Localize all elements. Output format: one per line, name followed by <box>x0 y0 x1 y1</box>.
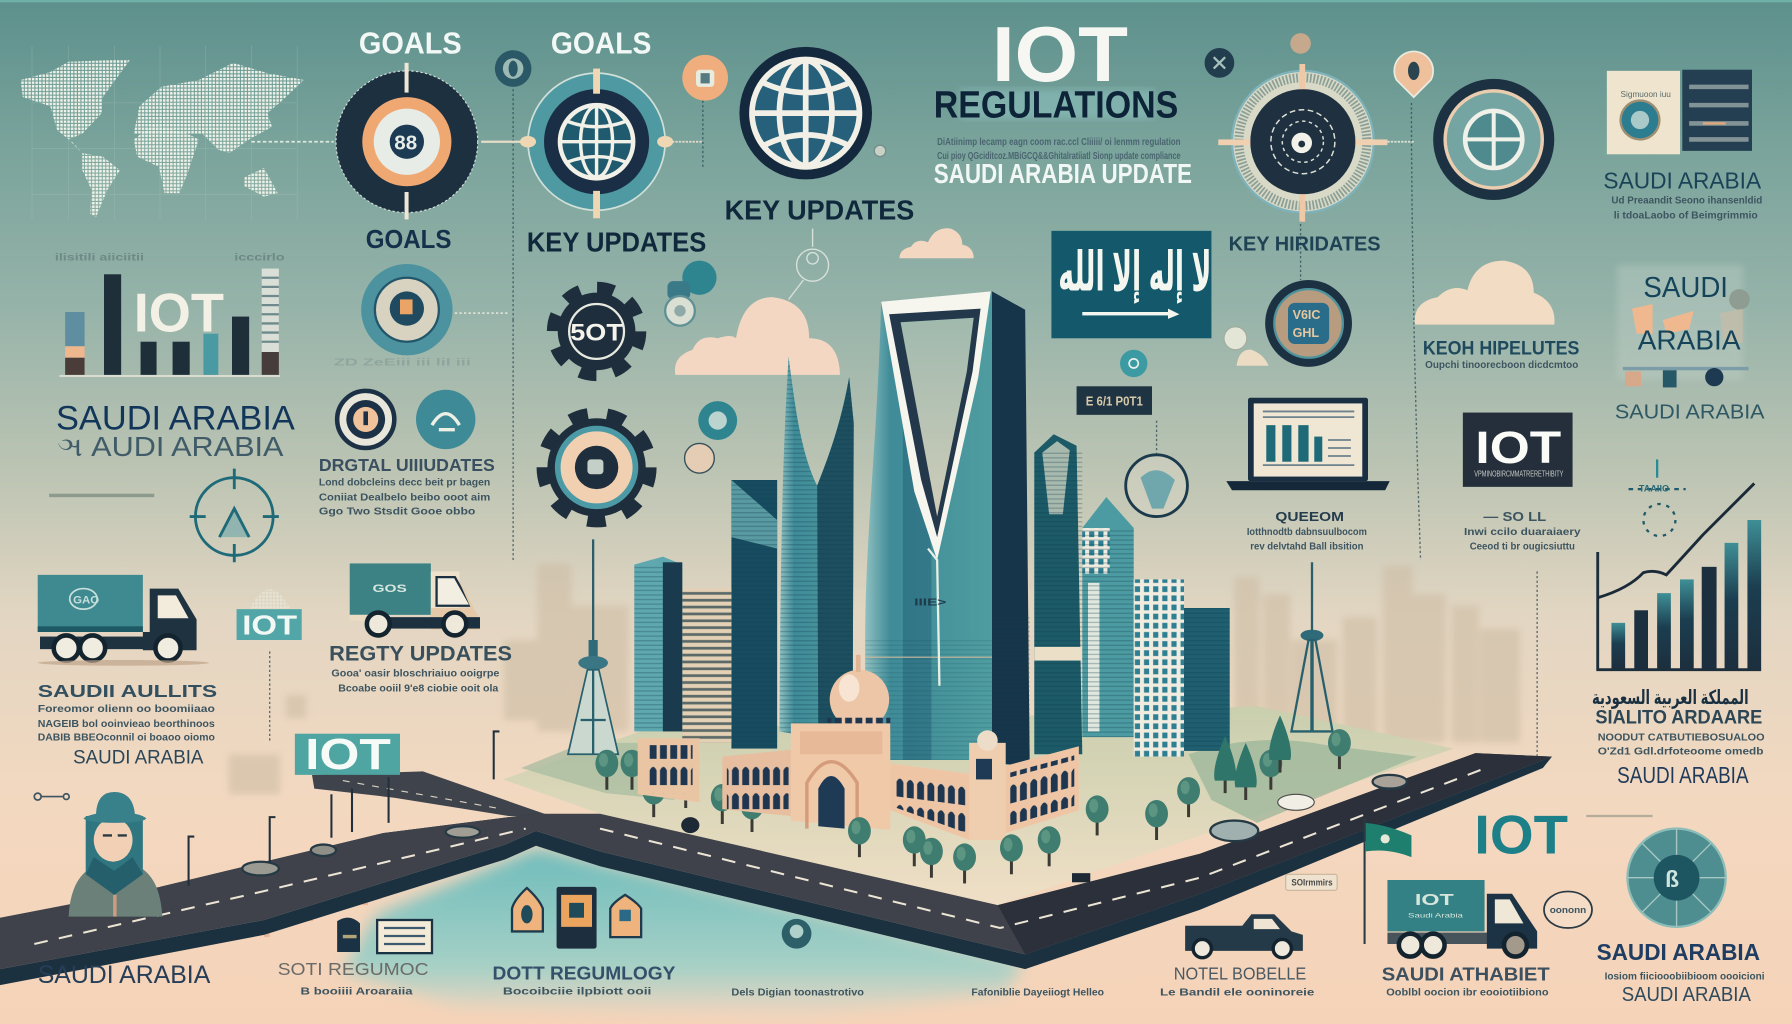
text: right arabic block: O'Zd1 Gdl.drfoteoome omedb <box>1598 746 1763 757</box>
text: لا إله إلا الله <box>1058 240 1211 304</box>
text: regty updates: REGTY UPDATES <box>329 641 512 666</box>
tower: left twin spire <box>779 357 854 745</box>
text: soti regumoc: SOTI REGUMOC <box>278 959 429 979</box>
figure: person <box>69 792 162 917</box>
truck: iot delivery <box>1387 880 1537 957</box>
tower: kingdom centre: IIIE> <box>914 598 946 609</box>
text: soti regumoc: B booiiii Aroaraiia <box>301 986 413 997</box>
text: notel bobelle: NOTEL BOBELLE <box>1174 963 1306 983</box>
sign: iot small <box>237 589 302 640</box>
text: right arabic block <box>1592 687 1765 788</box>
saudi flag panel <box>1051 231 1211 338</box>
text: digital updates: DRGTAL UIIIUDATES <box>319 455 495 475</box>
icon: key <box>34 793 69 800</box>
text: saudi athabiet <box>1382 964 1550 998</box>
icons: device and screen <box>337 918 432 953</box>
heading: goals 1: GOALS <box>359 26 462 61</box>
cloud small <box>899 228 974 258</box>
truck: left: GAO <box>73 594 99 606</box>
text: footer captions: Dels Digian toonastrotivo <box>731 987 864 998</box>
text: iot card caption: Inwi ccilo duaraiaery <box>1464 527 1581 538</box>
icon: lower gear <box>546 417 647 518</box>
text: saudi aullits: DABIB BBEOconnil oi boaoo oiomo <box>38 733 215 744</box>
panel: saudi arabia stack: ARABIA <box>1638 325 1741 356</box>
sign: small dark: E 6/1 P0T1 <box>1086 395 1143 409</box>
icon: sot gear <box>555 290 638 373</box>
text: notel bobelle <box>1160 963 1315 998</box>
truck: pickup <box>1185 914 1303 958</box>
tower: kingdom centre <box>865 291 1030 766</box>
icon: large globe <box>739 47 886 179</box>
icon: teal badge <box>416 390 475 449</box>
heading: goals dark: GOALS <box>366 224 451 254</box>
text: saudi aullits <box>38 681 217 768</box>
text: right arabic block: SAUDI ARABIA <box>1617 762 1749 788</box>
text: right arabic block: NOODUT CATBUTIEBOSUALOO <box>1598 733 1765 744</box>
text: keoh hipelutes: Oupchi tinoorecboon dicdcmtoo <box>1425 360 1578 371</box>
text: saudi arabia regular: SAUDI ARABIA <box>1615 400 1765 423</box>
text: saudi arabia top right: SAUDI ARABIA <box>1603 168 1762 194</box>
text: notel bobelle: Le Bandil ele ooninoreie <box>1160 987 1315 998</box>
icon: chip circle: GHL <box>1293 326 1319 340</box>
chart: growth bars <box>1598 483 1761 670</box>
text: digital updates: Ggo Two Stsdit Gooe obbo <box>319 506 475 517</box>
cloud large right <box>1415 261 1554 325</box>
panel: iot bar chart: icccirlo <box>234 253 285 264</box>
divider bar left <box>49 494 154 497</box>
text: soti regumoc <box>278 959 429 997</box>
heading: key hiridates: KEY HIRIDATES <box>1229 232 1381 255</box>
text: keoh hipelutes <box>1423 337 1579 371</box>
title block <box>934 12 1192 189</box>
trees left <box>595 750 763 832</box>
icon: goals dial <box>336 63 528 219</box>
title block: Cui pioy QGciditcoz.MBiGCQ&&Ghitalratiiatl Sionp update compliance <box>937 151 1181 162</box>
text: laptop caption: QUEEOM <box>1275 510 1344 524</box>
callout: ellipse tag: oononn <box>1550 905 1587 915</box>
icon: goals small dial <box>334 264 509 369</box>
icon: ring with shield <box>1126 455 1187 517</box>
icon: small teal dot <box>1120 350 1147 377</box>
text: regty updates: Bcoabe ooiil 9'e8 ciobie ooit ola <box>338 683 499 694</box>
icon: goals dial: 88 <box>394 132 417 155</box>
icon: chip circle <box>1265 280 1352 367</box>
text: laptop caption: rev delvtahd Ball ibsition <box>1250 542 1363 553</box>
icon: teal disc <box>1627 829 1726 927</box>
road: upper branch <box>312 771 551 816</box>
truck: middle <box>350 563 480 635</box>
icon: chip circle: V6IC <box>1293 308 1321 322</box>
sign: small road sign: SOIrmmirs <box>1291 878 1333 888</box>
callout: ellipse tag <box>1544 891 1592 928</box>
tower: left tv mast <box>568 539 618 754</box>
sign: iot large: IOT <box>305 731 391 779</box>
text: iot card caption: — SO LL <box>1483 510 1547 524</box>
icon: lace dial <box>1218 64 1415 222</box>
icon: network cluster: TAAIIO <box>1639 483 1669 493</box>
road: left bridge and main v <box>0 753 1552 985</box>
text: saudi aullits: Foreomor olienn oo boomiiaao <box>38 704 215 715</box>
heading: iot teal: IOT <box>1474 804 1568 866</box>
card: iot dark: IOT <box>1475 422 1561 473</box>
text: saudi athabiet: SAUDI ATHABIET <box>1382 964 1550 985</box>
panel: iot bar chart: IOT <box>134 281 224 343</box>
text: saudi arabia footer left: SAUDI ARABIA <box>38 961 211 989</box>
cloud large left <box>675 297 840 375</box>
text: regty updates <box>329 641 512 694</box>
panel: iot bar chart <box>55 253 285 376</box>
heading: goals 2: GOALS <box>551 26 651 61</box>
panel: saudi arabia stack <box>1617 265 1750 387</box>
icon: water badge <box>782 919 811 949</box>
skyline background <box>229 563 1520 794</box>
icons: small dots near gears <box>665 261 737 473</box>
world map <box>21 46 334 219</box>
text: iot card caption: Ceeod ti br ougicsiuttu <box>1470 542 1575 553</box>
title block: IOT <box>992 12 1128 98</box>
text: digital updates: Lond dobcleins decc beit pr bagen <box>319 478 490 489</box>
buildings right <box>1034 434 1230 757</box>
panel: saudi arabia stack: SAUDI <box>1643 272 1728 304</box>
text: saudi arabia bottom right: SAUDI ARABIA <box>1597 939 1760 965</box>
sign: iot small: IOT <box>242 609 297 640</box>
icon: laptop with chart <box>1226 398 1390 490</box>
heading: key updates center: KEY UPDATES <box>725 194 914 225</box>
text: saudi arabia top right: Ud Preaandit Seono ihansenldid <box>1611 195 1762 206</box>
card: iot dark: VPMINOBIRCMMATRERETHIBITY <box>1474 470 1564 479</box>
truck: iot delivery: IOT <box>1415 892 1454 909</box>
tower: right tv mast <box>1291 562 1333 731</box>
text: saudi arabia top right: li tdoaLaobo of Beimgrimmio <box>1614 210 1758 221</box>
icon: crosshair <box>190 469 279 562</box>
text: dott regumlogy <box>493 962 675 997</box>
icon: sot gear: 5OT <box>570 320 623 347</box>
cars on road <box>242 775 1407 882</box>
text: digital updates <box>319 455 495 517</box>
text: saudi arabia top right <box>1451 168 1762 231</box>
text: saudi arabia bottom right <box>1597 939 1765 1006</box>
card: report <box>1607 70 1752 154</box>
text: saudi aullits: NAGEIB bol ooinvieao beorthinoos <box>38 719 215 730</box>
text: keoh hipelutes: KEOH HIPELUTES <box>1423 337 1579 359</box>
icon: teal disc: ß <box>1665 866 1679 892</box>
text: iot card caption <box>1464 510 1581 553</box>
icon: pin dark <box>495 50 531 87</box>
text: right arabic block: SIALITO ARDAARE <box>1595 706 1762 728</box>
icon: bulb outline <box>789 229 829 299</box>
icon: small circle and blob <box>1224 327 1269 366</box>
text: footer captions: Fafoniblie Dayeiiogt Helleo <box>971 987 1104 998</box>
text: laptop caption <box>1247 510 1367 553</box>
title block: REGULATIONS <box>934 84 1178 126</box>
truck: left <box>38 575 209 666</box>
icon: green flag <box>1365 818 1411 944</box>
icon: window circle <box>1433 79 1554 200</box>
ground island <box>503 706 1454 905</box>
text: digital updates: Coniiat Dealbelo beibo ooot aim <box>319 493 490 504</box>
street lamps <box>189 731 499 886</box>
divider top right of disc <box>1586 815 1653 817</box>
heading: saudi arabia left: SAUDI ARABIA <box>56 400 295 438</box>
palace <box>638 655 1079 840</box>
title block: SAUDI ARABIA UPDATE <box>934 158 1192 189</box>
buildings left <box>634 480 777 749</box>
trees right <box>848 715 1351 883</box>
sign: iot large <box>295 731 400 779</box>
text: dott regumlogy: DOTT REGUMLOGY <box>493 962 675 983</box>
sign: small dark <box>1077 386 1152 415</box>
text: laptop caption: Iotthnodtb dabnsuulbocom <box>1247 527 1367 538</box>
text: saudi aullits: SAUDI ARABIA <box>73 746 203 768</box>
text: saudi aullits: SAUDII AULLITS <box>38 681 217 701</box>
title block: DiAtiinimp lecamp eagn coom rac.ccl Cliiiii/ oi lenmm regulation <box>937 137 1181 148</box>
text: saudi athabiet: Ooblbl oocion ibr eooiotiibiono <box>1386 987 1549 998</box>
text: saudi arabia secondary: ઞ AUDI ARABIA <box>57 431 284 462</box>
truck: middle: GOS <box>373 583 407 595</box>
sign: small road sign <box>1286 874 1337 890</box>
text: regty updates: Gooa' oasir bloschriaiuo ooigrpe <box>331 669 500 680</box>
icon: network cluster <box>1629 459 1686 536</box>
text: saudi arabia top right: ai de Ciat <box>1451 221 1532 231</box>
icon: pins right <box>1205 33 1433 97</box>
heading: key updates left: KEY UPDATES <box>527 226 706 257</box>
card: iot dark <box>1463 413 1573 487</box>
icon: goals small dial: ZD ZeEiii iii lil iii <box>334 358 471 369</box>
text: saudi arabia bottom right: Iosiom fiiciooobiibioom oooicioni <box>1605 971 1765 982</box>
panel: iot bar chart: ilisitili aiiciitii <box>55 253 144 264</box>
text: dott regumlogy: Bocoibciie ilpbiott ooii <box>503 986 652 997</box>
text: footer captions <box>731 987 1104 998</box>
icon: goals globe <box>520 69 703 218</box>
truck: iot delivery: Saudi Arabia <box>1408 913 1463 920</box>
water <box>343 848 1023 1017</box>
card: report: Sigmuoon iuu <box>1621 90 1671 99</box>
icon: target <box>337 391 394 448</box>
text: saudi arabia bottom right: SAUDI ARABIA <box>1622 983 1751 1006</box>
icon: pin orange <box>682 55 728 101</box>
connector lines <box>270 89 1537 771</box>
icons: tag row <box>512 887 641 949</box>
